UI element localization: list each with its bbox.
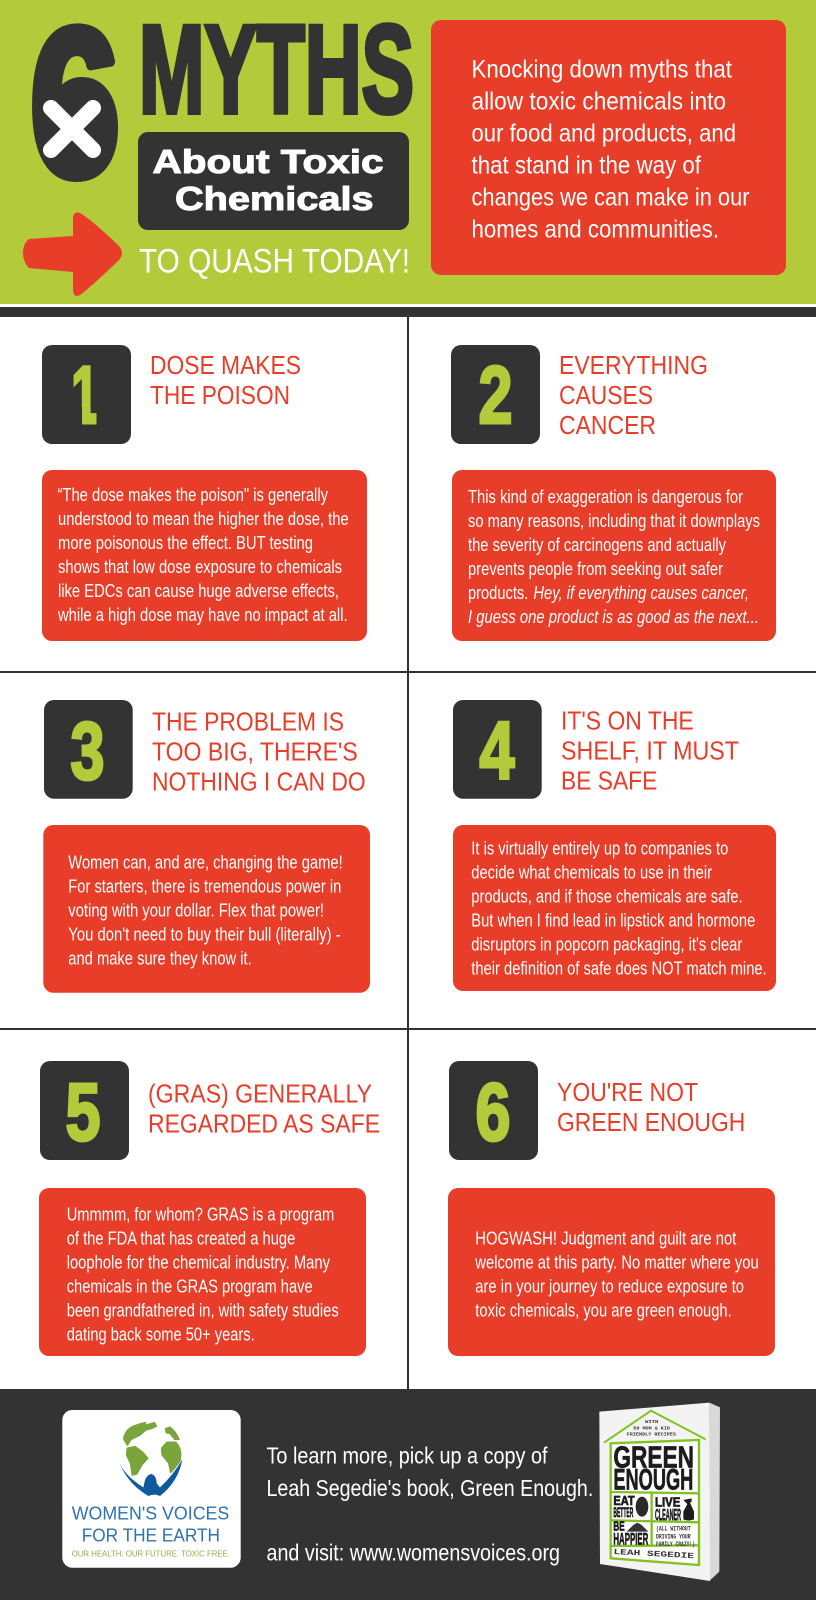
text box: [453, 825, 776, 991]
text box: products, and if those chemicals are safe.: [471, 886, 743, 907]
logo text: OUR HEALTH. OUR FUTURE. TOXIC FREE.: [72, 1549, 230, 1559]
text: learn more: [266, 1442, 593, 1566]
number badge 5: 5: [66, 1067, 100, 1158]
text box: more poisonous the effect. BUT testing: [58, 532, 313, 553]
panel: myth 3: [43, 700, 370, 993]
text box: shows that low dose exposure to chemicals: [58, 556, 342, 577]
book cover: Green Enough: 50 MOM & KID: [633, 1426, 670, 1431]
heading: it's on the shelf: SHELF, IT MUST: [561, 735, 739, 765]
callout: intro text: that stand in the way of: [472, 152, 701, 180]
heading: everything causes cancer: CAUSES: [559, 380, 653, 410]
text: learn more: To learn more, pick up a copy of: [266, 1442, 548, 1468]
text box: of the FDA that has created a huge: [67, 1228, 295, 1249]
text box: You don't need to buy their bull (literally) -: [68, 924, 341, 945]
logo text: FOR THE EARTH: [82, 1526, 220, 1546]
text box: toxic chemicals, you are green enough.: [475, 1300, 732, 1321]
heading: dose makes the poison: DOSE MAKES: [150, 350, 301, 380]
text box: the severity of carcinogens and actually: [468, 534, 727, 555]
text box: while a high dose may have no impact at all.: [57, 604, 348, 625]
text box: are in your journey to reduce exposure to: [475, 1276, 744, 1297]
panel: myth 1: [42, 345, 367, 641]
text box: products.: [468, 582, 528, 603]
heading: dose makes the poison: [150, 350, 301, 410]
heading: GRAS generally regarded as safe: [148, 1079, 380, 1139]
number badge 4: [453, 700, 542, 799]
panel: myth 5: [39, 1061, 380, 1356]
heading: GRAS generally regarded as safe: REGARDED AS SAFE: [148, 1109, 380, 1139]
text box: [452, 470, 776, 641]
heading: the problem is too big: THE PROBLEM IS: [152, 707, 344, 737]
book cover: Green Enough: FAMILY CRAZY!): [656, 1541, 695, 1548]
heading: the problem is too big: TOO BIG, THERE'S: [152, 737, 358, 767]
text box: disruptors in popcorn packaging, it's clear: [471, 934, 742, 955]
heading: it's on the shelf: IT'S ON THE: [561, 705, 694, 735]
book cover: Green Enough: DRIVING YOUR: [656, 1533, 691, 1540]
book cover: Green Enough: EAT: [613, 1494, 635, 1508]
book cover: Green Enough: LEAH SEGEDIE: [613, 1548, 694, 1561]
number badge 3: 3: [70, 706, 104, 797]
text box: and make sure they know it.: [68, 948, 252, 969]
heading: it's on the shelf: [561, 705, 739, 795]
logo text: WOMEN'S VOICES: [72, 1503, 229, 1523]
callout: intro text: homes and communities.: [472, 216, 719, 244]
arrow: red pointing right: [23, 212, 122, 296]
text box: Women can, and are, changing the game!: [68, 852, 343, 873]
book cover: Green Enough: BE: [613, 1520, 625, 1534]
callout: intro text: changes we can make in our: [472, 184, 750, 212]
text box: [448, 1188, 775, 1356]
text box: HOGWASH! Judgment and guilt are not: [475, 1228, 736, 1249]
heading: everything causes cancer: [559, 350, 708, 440]
text box: dating back some 50+ years.: [67, 1324, 255, 1345]
number badge 1: 1: [71, 350, 99, 441]
book cover: Green Enough: WITH: [645, 1420, 659, 1425]
panel: myth 4: [453, 700, 776, 991]
heading: the problem is too big: NOTHING I CAN DO: [152, 767, 366, 797]
text box: prevents people from seeking out safer: [468, 558, 723, 579]
number badge 2: [451, 345, 540, 444]
callout: intro text: Knocking down myths that: [472, 56, 732, 84]
text: learn more: and visit: www.womensvoices.org: [266, 1540, 560, 1566]
heading: dose makes the poison: THE POISON: [150, 380, 290, 410]
book cover: Green Enough: GREEN: [613, 1440, 694, 1474]
text box: been grandfathered in, with safety studies: [67, 1300, 339, 1321]
panel: header: [0, 0, 816, 317]
text box: Ummmm, for whom? GRAS is a program: [67, 1204, 334, 1225]
heading: you're not green enough: GREEN ENOUGH: [557, 1107, 745, 1137]
subtitle box: About Toxic Chemicals: Chemicals: [175, 180, 374, 217]
book cover: Green Enough: CLEANER: [655, 1507, 681, 1524]
text box: loophole for the chemical industry. Many: [67, 1252, 331, 1273]
text box: [42, 470, 367, 641]
text box: Hey, if everything causes cancer,: [533, 582, 749, 603]
book cover: Green Enough: (ALL WITHOUT: [656, 1526, 691, 1533]
book cover: Green Enough: FRIENDLY RECIPES: [627, 1433, 676, 1438]
subtitle box: About Toxic Chemicals: About Toxic: [152, 143, 384, 180]
text: learn more: Leah Segedie's book, Green Enough.: [266, 1475, 593, 1501]
book cover: Green Enough: ENOUGH: [613, 1463, 693, 1496]
text box: “The dose makes the poison" is generally: [58, 484, 329, 505]
text box: This kind of exaggeration is dangerous for: [468, 486, 743, 507]
heading: the problem is too big: [152, 707, 366, 797]
book cover: Green Enough: [599, 1403, 720, 1581]
heading: you're not green enough: [557, 1077, 745, 1137]
logo text: [72, 1503, 230, 1559]
number badge 3: [44, 700, 133, 799]
text box: decide what chemicals to use in their: [471, 862, 712, 883]
number badge 1: [42, 345, 131, 444]
text box: understood to mean the higher the dose, the: [58, 508, 349, 529]
book cover: Green Enough: HAPPIER: [613, 1529, 648, 1548]
text box: like EDCs can cause huge adverse effects,: [58, 580, 339, 601]
text box: It is virtually entirely up to companies to: [471, 838, 728, 859]
number badge 2: 2: [478, 350, 512, 441]
heading: everything causes cancer: EVERYTHING: [559, 350, 708, 380]
text box: For starters, there is tremendous power in: [68, 876, 341, 897]
text box: chemicals in the GRAS program have: [67, 1276, 313, 1297]
heading: it's on the shelf: BE SAFE: [561, 765, 657, 795]
callout: intro text: our food and products, and: [472, 120, 736, 148]
book cover: Green Enough: BETTER: [613, 1504, 633, 1520]
icon: globe with figure: [118, 1423, 182, 1496]
number badge 6: [449, 1061, 538, 1160]
heading: GRAS generally regarded as safe: (GRAS) GENERALLY: [148, 1079, 372, 1109]
text box: [43, 825, 370, 993]
panel: myth 2: [451, 345, 776, 641]
text box: [39, 1188, 366, 1356]
callout: intro text: [431, 20, 786, 275]
number badge 4: 4: [480, 706, 515, 796]
icon: white X: [51, 108, 93, 150]
title: MYTHS: MYTHS: [139, 0, 414, 140]
heading: you're not green enough: YOU'RE NOT: [557, 1077, 698, 1107]
number badge 6: 6: [476, 1067, 510, 1158]
heading: everything causes cancer: CANCER: [559, 410, 656, 440]
heading: to quash today: TO QUASH TODAY!: [139, 243, 410, 281]
number badge 5: [40, 1061, 129, 1160]
panel: myth 6: [448, 1061, 775, 1356]
callout: intro text: allow toxic chemicals into: [472, 88, 726, 116]
panel: footer: [0, 1389, 816, 1600]
subtitle box: About Toxic Chemicals: [138, 132, 409, 230]
book cover: Green Enough: LIVE: [655, 1495, 680, 1509]
logo card: Women's Voices for the Earth: [62, 1410, 241, 1568]
text box: voting with your dollar. Flex that power!: [68, 900, 324, 921]
